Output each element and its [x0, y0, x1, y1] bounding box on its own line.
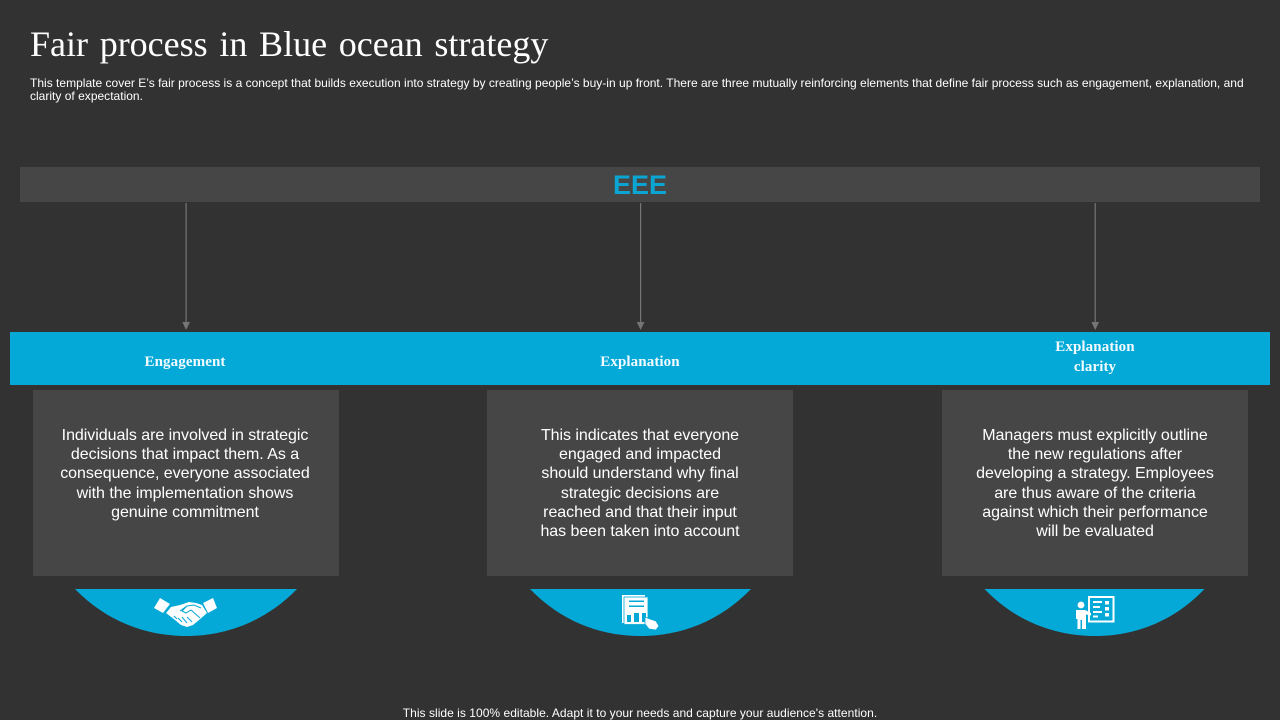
icon: presenter at board on blue semicircle	[984, 589, 1204, 636]
explanation description: This indicates that everyone	[541, 427, 739, 444]
clarity description	[976, 427, 1214, 540]
panel: clarity text	[942, 390, 1248, 576]
heading: Explanation: Explanation	[600, 354, 680, 370]
engagement description: Individuals are involved in strategic	[62, 427, 308, 444]
top bar: EEE: EEE	[613, 170, 667, 200]
heading: Explanation clarity	[1055, 338, 1135, 374]
intro text: This template cover E’s fair process is a concept that builds execution into strategy by creating people’s buy-in up front. There are three mutually reinforcing elements that define fair process such as engagement, explanation, and	[30, 76, 1244, 90]
icon: report with pointing hand on blue semicircle	[530, 589, 751, 636]
panel: explanation text	[487, 390, 793, 576]
footer note: This slide is 100% editable. Adapt it to your needs and capture your audience's attention.	[403, 706, 877, 720]
engagement description	[60, 427, 310, 521]
title: Fair process in Blue ocean strategy	[30, 24, 548, 64]
clarity description: developing a strategy. Employees	[976, 465, 1214, 482]
engagement description: consequence, everyone associated	[60, 465, 310, 482]
icon: handshake on blue semicircle	[75, 589, 297, 636]
clarity description: the new regulations after	[1008, 446, 1182, 463]
panel: engagement text	[33, 390, 339, 576]
top bar: EEE	[20, 167, 1260, 202]
intro text	[30, 76, 1244, 103]
engagement description: decisions that impact them. As a	[71, 446, 299, 463]
explanation description: should understand why final	[541, 465, 739, 482]
clarity description: Managers must explicitly outline	[982, 427, 1208, 444]
intro text: clarity of expectation.	[30, 89, 143, 103]
explanation description: engaged and impacted	[559, 446, 721, 463]
explanation description	[540, 427, 740, 540]
heading band	[10, 332, 1270, 385]
heading: Engagement: Engagement	[144, 354, 226, 370]
heading: Explanation clarity: clarity	[1074, 358, 1116, 374]
explanation description: reached and that their input	[543, 504, 737, 521]
clarity description: are thus aware of the criteria	[994, 485, 1196, 502]
explanation description: strategic decisions are	[561, 485, 719, 502]
explanation description: has been taken into account	[540, 523, 740, 540]
engagement description: genuine commitment	[111, 504, 259, 521]
heading: Explanation clarity: Explanation	[1055, 338, 1135, 354]
clarity description: against which their performance	[982, 504, 1208, 521]
engagement description: with the implementation shows	[77, 485, 293, 502]
clarity description: will be evaluated	[1036, 523, 1154, 540]
